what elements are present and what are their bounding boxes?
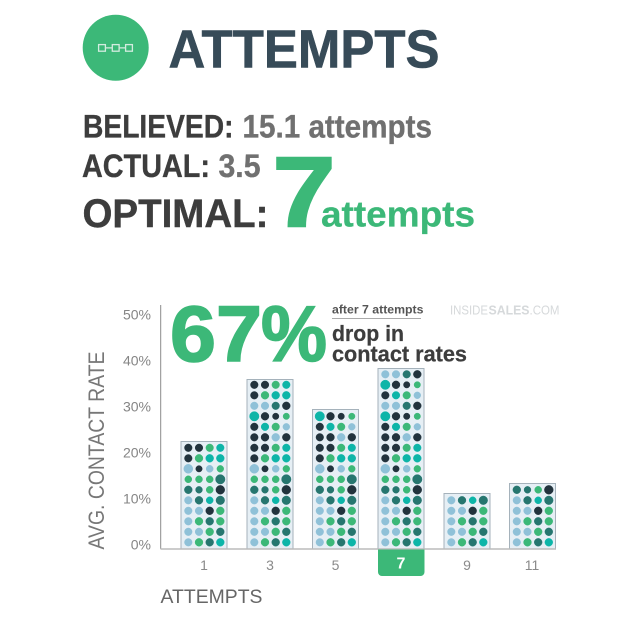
- y axis labels: 40%: [123, 352, 151, 368]
- callout: 67 percent: %: [261, 289, 327, 378]
- bar: 5 attempts: [312, 410, 358, 549]
- logo: insidesales.com: SALES: [488, 302, 530, 317]
- y axis labels: 0%: [131, 536, 151, 552]
- text block: believed attempts: 15.1 attempts: [242, 108, 432, 144]
- bar: 11 attempts: [510, 484, 556, 549]
- icon: green circle with chain of squares: [83, 15, 149, 81]
- bar: 1 attempt: [181, 442, 227, 549]
- logo: insidesales.com: [450, 302, 560, 317]
- text block: believed attempts: BELIEVED:: [83, 108, 234, 144]
- logo: insidesales.com: .COM: [530, 302, 560, 317]
- x axis labels: 1: [200, 557, 208, 573]
- callout: 67 percent: [170, 289, 327, 378]
- y axis title: AVG. CONTACT RATE: [84, 352, 109, 550]
- x axis labels: 5: [332, 557, 340, 573]
- text block: actual attempts: 3.5: [218, 148, 260, 184]
- callout: drop in contact rates: contact rates: [332, 342, 467, 366]
- bar: 7 attempts: [378, 368, 424, 549]
- x axis labels: 11: [525, 557, 539, 573]
- x axis title: ATTEMPTS: [160, 586, 262, 608]
- x axis labels: 9: [463, 557, 471, 573]
- callout: after 7 attempts: after 7 attempts: [332, 302, 424, 316]
- y axis labels: 30%: [123, 398, 151, 414]
- logo: insidesales.com: INSIDE: [450, 302, 488, 317]
- y axis labels: 50%: [123, 306, 151, 322]
- text block: optimal attempts: 7: [272, 136, 336, 247]
- text block: optimal attempts: OPTIMAL:: [82, 192, 268, 236]
- highlighted tab: 7 attempts: 7: [397, 556, 406, 572]
- text block: actual attempts: ACTUAL:: [82, 148, 210, 184]
- text block: optimal attempts: [82, 136, 475, 247]
- y axis labels: 10%: [123, 490, 151, 506]
- y axis labels: 20%: [123, 444, 151, 460]
- bar: 9 attempts: [444, 494, 490, 549]
- x axis labels: [200, 557, 539, 573]
- y axis labels: [123, 306, 151, 552]
- text block: optimal attempts: attempts: [321, 194, 475, 234]
- bar: 3 attempts: [247, 380, 293, 549]
- x axis labels: 3: [266, 557, 274, 573]
- callout: 67 percent: 67: [170, 289, 262, 378]
- title: ATTEMPTS: [168, 19, 440, 79]
- callout: drop in contact rates: [332, 321, 467, 366]
- text block: believed attempts: [83, 108, 432, 144]
- callout: drop in contact rates: drop in: [332, 321, 404, 346]
- highlighted tab: 7 attempts: [378, 550, 424, 576]
